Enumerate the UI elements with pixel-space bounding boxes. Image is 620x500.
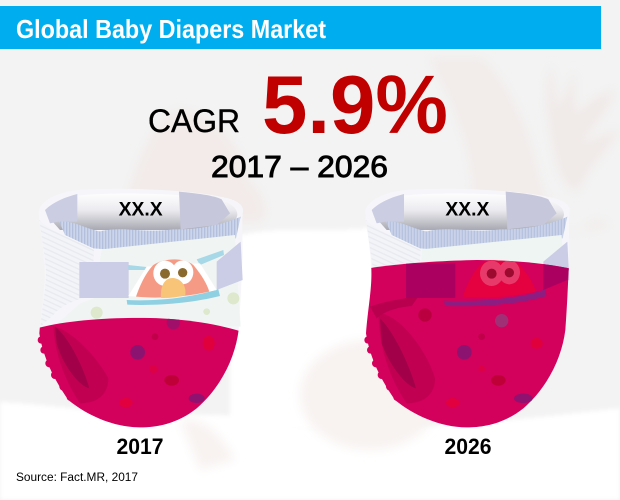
left tab tinted [406, 263, 455, 298]
print dots [91, 292, 239, 319]
pink upper and lower fill [364, 260, 569, 428]
inner waistband [47, 194, 237, 230]
period: 2017 – 2026 [211, 149, 388, 184]
right tab tinted [543, 263, 569, 290]
leg ruffle [38, 336, 70, 401]
diaper 2026 [364, 189, 570, 427]
blue strips [128, 265, 150, 270]
front panel [53, 235, 241, 327]
background: baby foot [123, 110, 265, 222]
background: baby hand [546, 65, 620, 191]
side panel [366, 220, 421, 327]
value: XX.X [119, 199, 163, 220]
background: baby arm [428, 58, 610, 235]
side panel [39, 220, 94, 327]
CAGR value: 5.9% [262, 58, 448, 151]
value: XX.X [445, 199, 490, 220]
monster character overlay [463, 259, 536, 298]
pink lower fill [38, 318, 239, 428]
right tab [217, 242, 243, 290]
monster character [128, 259, 217, 298]
source: Source: Fact.MR, 2017 [16, 472, 138, 484]
left tab [79, 262, 129, 298]
background: pale skin under right diaper [300, 340, 440, 450]
title banner [0, 6, 601, 49]
background: lower leg [180, 419, 235, 470]
ribbed elastic [386, 217, 567, 250]
inner waistband [373, 194, 564, 230]
ribbed elastic [59, 217, 241, 250]
diaper 2017 [38, 189, 243, 427]
title banner: Global Baby Diapers Market [16, 14, 326, 44]
front panel [420, 235, 566, 318]
background: bed sheet [0, 402, 620, 500]
CAGR label: CAGR [148, 103, 240, 139]
leg ruffle [364, 336, 396, 401]
background: baby torso [230, 225, 398, 430]
year label 2017: 2017 [116, 434, 164, 459]
year label 2026: 2026 [444, 434, 492, 459]
right tab [543, 242, 569, 290]
purple stitched strip [444, 289, 547, 306]
